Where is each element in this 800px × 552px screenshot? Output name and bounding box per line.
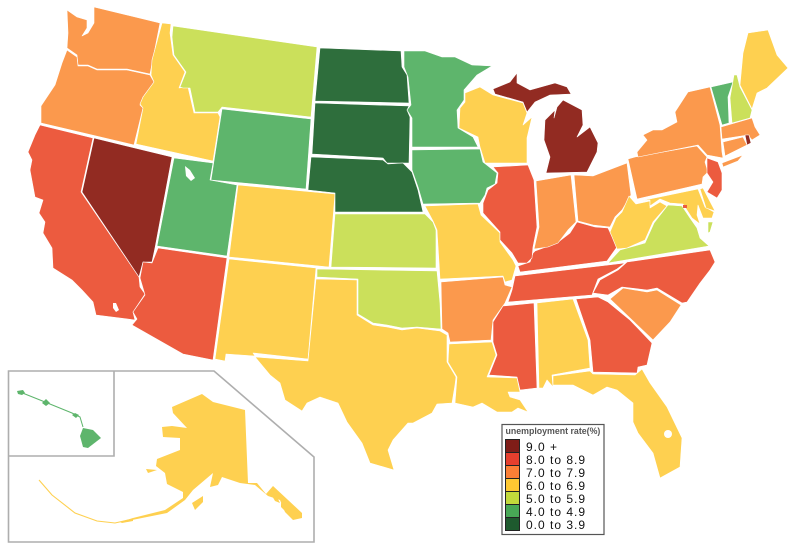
state: Oklahoma bbox=[317, 269, 441, 329]
state: Connecticut bbox=[723, 137, 747, 156]
state: Arizona bbox=[132, 248, 227, 360]
state: Alaska bbox=[39, 394, 302, 523]
legend labels: 8.0 to 8.9 bbox=[526, 453, 586, 467]
legend bbox=[502, 424, 604, 534]
state: Wisconsin bbox=[459, 87, 532, 163]
state: Rhode Island bbox=[745, 135, 751, 145]
state: New York bbox=[637, 87, 743, 167]
state: North Dakota bbox=[315, 48, 409, 103]
state: Massachusetts bbox=[721, 118, 760, 140]
state: Kentucky bbox=[518, 222, 617, 272]
inset frame: Alaska and Hawaii bbox=[8, 371, 314, 542]
state: Missouri bbox=[425, 204, 516, 282]
state: Pennsylvania bbox=[628, 146, 708, 199]
state: Illinois bbox=[483, 165, 537, 263]
state: Texas bbox=[255, 279, 456, 470]
state: Indiana bbox=[534, 175, 576, 249]
legend swatches bbox=[506, 440, 520, 530]
legend labels: 9.0 + bbox=[526, 440, 558, 454]
state: Georgia bbox=[576, 297, 652, 373]
state: New Jersey bbox=[707, 158, 722, 198]
state: Montana bbox=[172, 26, 317, 117]
state: Washington bbox=[67, 7, 160, 74]
legend labels: 7.0 to 7.9 bbox=[526, 466, 586, 480]
state: Tennessee bbox=[508, 263, 625, 302]
state: Nebraska bbox=[308, 157, 423, 212]
state: Nevada bbox=[82, 138, 172, 277]
state: South Carolina bbox=[610, 288, 681, 340]
legend labels: 6.0 to 6.9 bbox=[526, 479, 586, 493]
state: Kansas bbox=[331, 214, 436, 268]
state: South Dakota bbox=[312, 103, 410, 163]
state: Colorado bbox=[229, 185, 335, 267]
state: District of Columbia bbox=[683, 205, 687, 208]
state: Louisiana bbox=[448, 342, 528, 412]
legend labels: 4.0 to 4.9 bbox=[526, 505, 586, 519]
state: Utah bbox=[157, 158, 237, 256]
state: Maine bbox=[740, 30, 788, 109]
state: Oregon bbox=[41, 50, 154, 145]
legend labels bbox=[526, 440, 586, 532]
state: Mississippi bbox=[489, 303, 537, 390]
state: Vermont bbox=[711, 82, 733, 125]
legend title: unemployment rate(%) bbox=[506, 426, 600, 436]
state: Iowa bbox=[412, 149, 497, 204]
state: Maryland bbox=[640, 189, 714, 224]
state: Delaware bbox=[700, 188, 715, 211]
state: Idaho bbox=[136, 23, 220, 161]
state: Alabama bbox=[537, 299, 590, 388]
legend labels: 5.0 to 5.9 bbox=[526, 492, 586, 506]
state: North Carolina bbox=[593, 250, 715, 303]
state: Ohio bbox=[574, 163, 631, 227]
state: Minnesota bbox=[404, 51, 492, 147]
state: Arkansas bbox=[441, 277, 512, 342]
state: New Hampshire bbox=[730, 75, 752, 123]
state: California bbox=[28, 125, 145, 320]
state: West Virginia bbox=[610, 196, 667, 249]
state: Wyoming bbox=[211, 109, 311, 189]
state: Michigan bbox=[493, 73, 598, 173]
state: Florida bbox=[553, 369, 682, 478]
state: New Mexico bbox=[215, 259, 316, 361]
state: Hawaii bbox=[17, 390, 101, 448]
legend labels: 0.0 to 3.9 bbox=[526, 518, 586, 532]
state: Virginia bbox=[608, 205, 713, 263]
